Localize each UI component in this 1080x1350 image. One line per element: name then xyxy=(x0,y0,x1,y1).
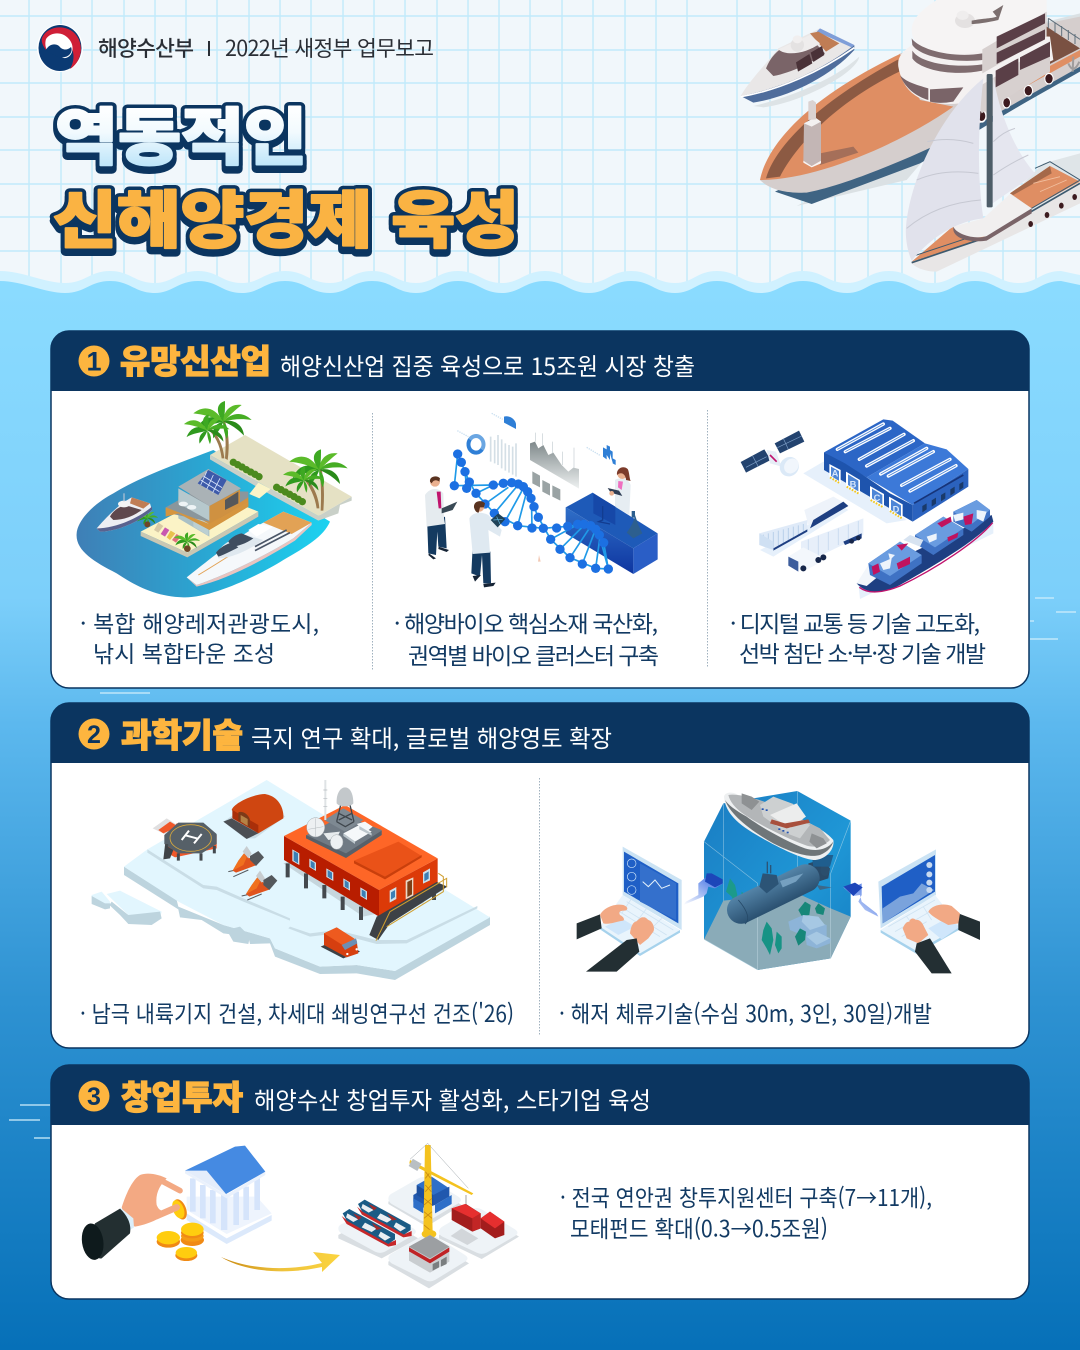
icon: satellite, warehouse, truck and container ship: C xyxy=(874,493,881,503)
title line 1: 역동적인 xyxy=(55,87,307,177)
research ship xyxy=(724,793,834,860)
text: technology bullet: · 디지털 교통 등 기술 고도화, xyxy=(730,605,980,639)
container ship rear xyxy=(357,1200,412,1237)
trailer and truck xyxy=(759,497,863,572)
panel header bar xyxy=(51,331,1029,391)
left laptop xyxy=(577,847,682,972)
text: subsea technology bullet: · 해저 체류기술(수심 30m, 3인, 30일)개발 xyxy=(559,995,932,1029)
text: resort city bullet: · 복합 해양레저관광도시, xyxy=(80,605,319,639)
arrow: investment flow xyxy=(221,1252,340,1272)
logo: government taegeuk emblem xyxy=(37,24,83,72)
number badge 3: 3 xyxy=(87,1083,101,1111)
icon: satellite, warehouse, truck and container ship: A xyxy=(832,469,839,479)
snowmobile lower xyxy=(242,871,277,900)
title line 1: 역동적인 xyxy=(55,87,307,177)
illustration: three ships xyxy=(741,0,1080,272)
subheading: 해양신산업 집중 육성으로 15조원 시장 창출 xyxy=(280,347,695,382)
panel background xyxy=(51,331,1029,688)
number badge 2: 2 xyxy=(87,721,101,749)
right laptop xyxy=(878,849,980,973)
icon: gold coins xyxy=(157,1197,204,1261)
icon: satellite, warehouse, truck and container ship: B xyxy=(850,479,857,489)
text: startup support bullet: · 전국 연안권 창투지원센터 구축(7→11개), xyxy=(560,1179,932,1213)
title line 2: 신해양경제 육성 xyxy=(53,170,519,260)
title line 2: 신해양경제 육성 xyxy=(53,170,519,260)
title line 2: 신해양경제 육성 xyxy=(53,174,519,264)
subheading: 해양수산 창업투자 활성화, 스타기업 육성 xyxy=(254,1081,651,1116)
heading: 창업투자 xyxy=(121,1071,243,1119)
background: graph paper xyxy=(0,0,1080,300)
text: biotech bullet line 2: 권역별 바이오 클러스터 구축 xyxy=(408,637,659,671)
text: startup support bullet line 2: 모태펀드 확대(0.3→0.5조원) xyxy=(570,1210,828,1244)
card 2: science and technology xyxy=(51,703,1029,1048)
container ship front xyxy=(342,1209,396,1247)
icon: Antarctic research base xyxy=(92,780,490,980)
icon: satellite, warehouse, truck and container ship xyxy=(741,419,993,599)
heading: 과학기술 xyxy=(121,709,243,757)
text: resort city bullet line 2: 낚시 복합타운 조성 xyxy=(93,635,275,669)
icon: bank building xyxy=(185,1146,272,1244)
title line 1: 역동적인 xyxy=(55,91,307,181)
icon: hand and suit sleeve xyxy=(80,1174,180,1261)
snowmobile upper xyxy=(228,846,264,877)
container ship xyxy=(857,500,993,592)
number badge 1: 1 xyxy=(86,346,102,376)
panel header bar xyxy=(51,1065,1029,1125)
background: sea with waves xyxy=(0,271,1080,1350)
header text: ministry and report name: 해양수산부 xyxy=(98,32,194,63)
number badge 1 xyxy=(78,346,110,376)
icon: resort island xyxy=(77,401,352,597)
text: Antarctic base bullet: · 남극 내륙기지 건설, 차세대 쇄빙연구선 건조('26) xyxy=(80,995,514,1029)
icon: hand placing coins by bank xyxy=(80,1146,272,1261)
panel header bar xyxy=(51,703,1029,763)
panel background xyxy=(51,1065,1029,1299)
card 3: startup investment xyxy=(51,1065,1029,1299)
icon: small motorboat xyxy=(741,28,859,107)
text: technology bullet line 2: 선박 첨단 소·부·장 기술 개발 xyxy=(739,635,986,669)
icon: sailing yacht xyxy=(906,74,1080,272)
icon: marine biotech DNA lab xyxy=(425,413,658,587)
number badge 3 xyxy=(78,1080,110,1112)
text: biotech bullet: · 해양바이오 핵심소재 국산화, xyxy=(394,605,658,639)
number badge 2 xyxy=(78,718,110,750)
subheading: 극지 연구 확대, 글로벌 해양영토 확장 xyxy=(251,719,612,754)
header text: ministry and report name xyxy=(98,32,434,63)
submarine xyxy=(722,859,832,929)
icon: undersea habitat tank with laptops xyxy=(577,791,980,973)
icon: port with crane and ships xyxy=(338,1143,519,1288)
heading: 유망신산업 xyxy=(120,335,271,383)
icon: satellite, warehouse, truck and container ship: D xyxy=(893,505,900,515)
header text: ministry and report name: 2022년 새정부 업무보고 xyxy=(225,32,434,63)
icon: large ship xyxy=(760,0,1080,206)
panel background xyxy=(51,703,1029,1048)
card 1: promising new industries xyxy=(51,331,1029,688)
